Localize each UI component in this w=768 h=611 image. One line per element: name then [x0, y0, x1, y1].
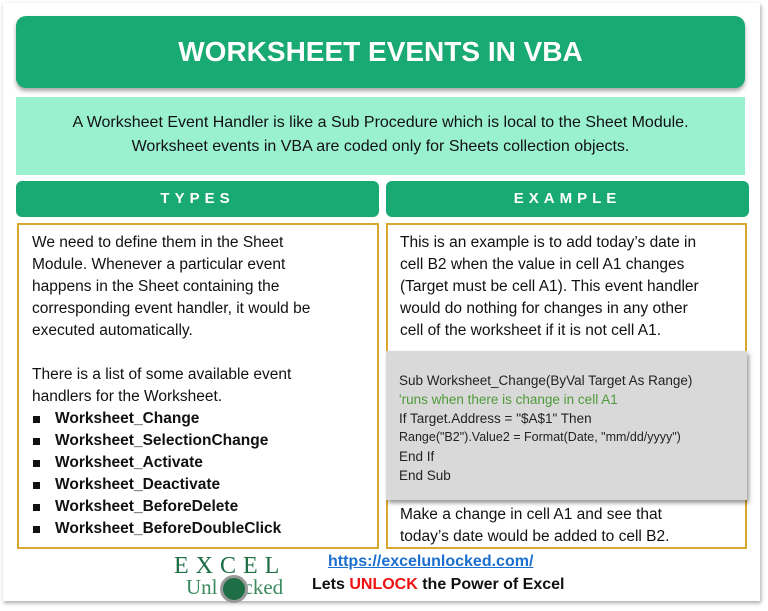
heading: example — [386, 181, 749, 217]
code block: Range("B2").Value2 = Format(Date, "mm/dd/yyyy") — [399, 430, 681, 444]
event list — [33, 410, 282, 537]
types description: corresponding event handler, it would be — [32, 300, 310, 317]
tagline: Lets UNLOCK the Power of Excel — [312, 576, 564, 593]
logo: EXCEL — [174, 553, 286, 579]
heading: types — [16, 181, 379, 217]
types description — [32, 234, 310, 405]
example description: cell of the worksheet if it is not cell A1. — [400, 322, 661, 339]
event list: Worksheet_BeforeDoubleClick — [55, 520, 281, 537]
title — [16, 16, 745, 88]
types description: happens in the Sheet containing the — [32, 278, 279, 295]
panel: example — [386, 223, 747, 549]
logo — [174, 553, 286, 603]
code block: 'runs when there is change in cell A1 — [399, 392, 618, 407]
code block: If Target.Address = "$A$1" Then — [399, 411, 592, 426]
example conclusion: today’s date would be added to cell B2. — [400, 528, 669, 545]
code block: End Sub — [399, 468, 451, 483]
heading: types: TYPES — [160, 190, 235, 207]
icon: lock — [220, 575, 248, 603]
example conclusion: Make a change in cell A1 and see that — [400, 506, 662, 523]
event list: Worksheet_Deactivate — [55, 476, 220, 493]
code block: Sub Worksheet_Change(ByVal Target As Range) — [399, 373, 692, 388]
event list: Worksheet_SelectionChange — [55, 432, 268, 449]
types description: Module. Whenever a particular event — [32, 256, 285, 273]
heading: example: EXAMPLE — [514, 190, 621, 207]
code block: End If — [399, 449, 434, 464]
code block — [386, 351, 747, 500]
types description: executed automatically. — [32, 322, 193, 339]
panel: types — [17, 223, 379, 549]
title: WORKSHEET EVENTS IN VBA — [178, 36, 583, 67]
example description: This is an example is to add today’s date in — [400, 234, 696, 251]
intro text block: Worksheet events in VBA are coded only for Sheets collection objects. — [132, 138, 629, 155]
types description: There is a list of some available event — [32, 366, 291, 383]
example description: (Target must be cell A1). This event handler — [400, 278, 699, 295]
event list: Worksheet_Change — [55, 410, 199, 427]
types description: handlers for the Worksheet. — [32, 388, 222, 405]
intro text block: A Worksheet Event Handler is like a Sub Procedure which is local to the Sheet Module. — [72, 114, 689, 131]
example description: would do nothing for changes in any other — [400, 300, 688, 317]
example description — [400, 234, 699, 339]
example conclusion — [400, 506, 669, 545]
intro text block — [16, 97, 745, 175]
event list: Worksheet_Activate — [55, 454, 203, 471]
website link: https://excelunlocked.com/ — [328, 553, 533, 570]
logo: Unl cked — [186, 575, 283, 599]
example description: cell B2 when the value in cell A1 changes — [400, 256, 684, 273]
types description: We need to define them in the Sheet — [32, 234, 283, 251]
event list: Worksheet_BeforeDelete — [55, 498, 238, 515]
